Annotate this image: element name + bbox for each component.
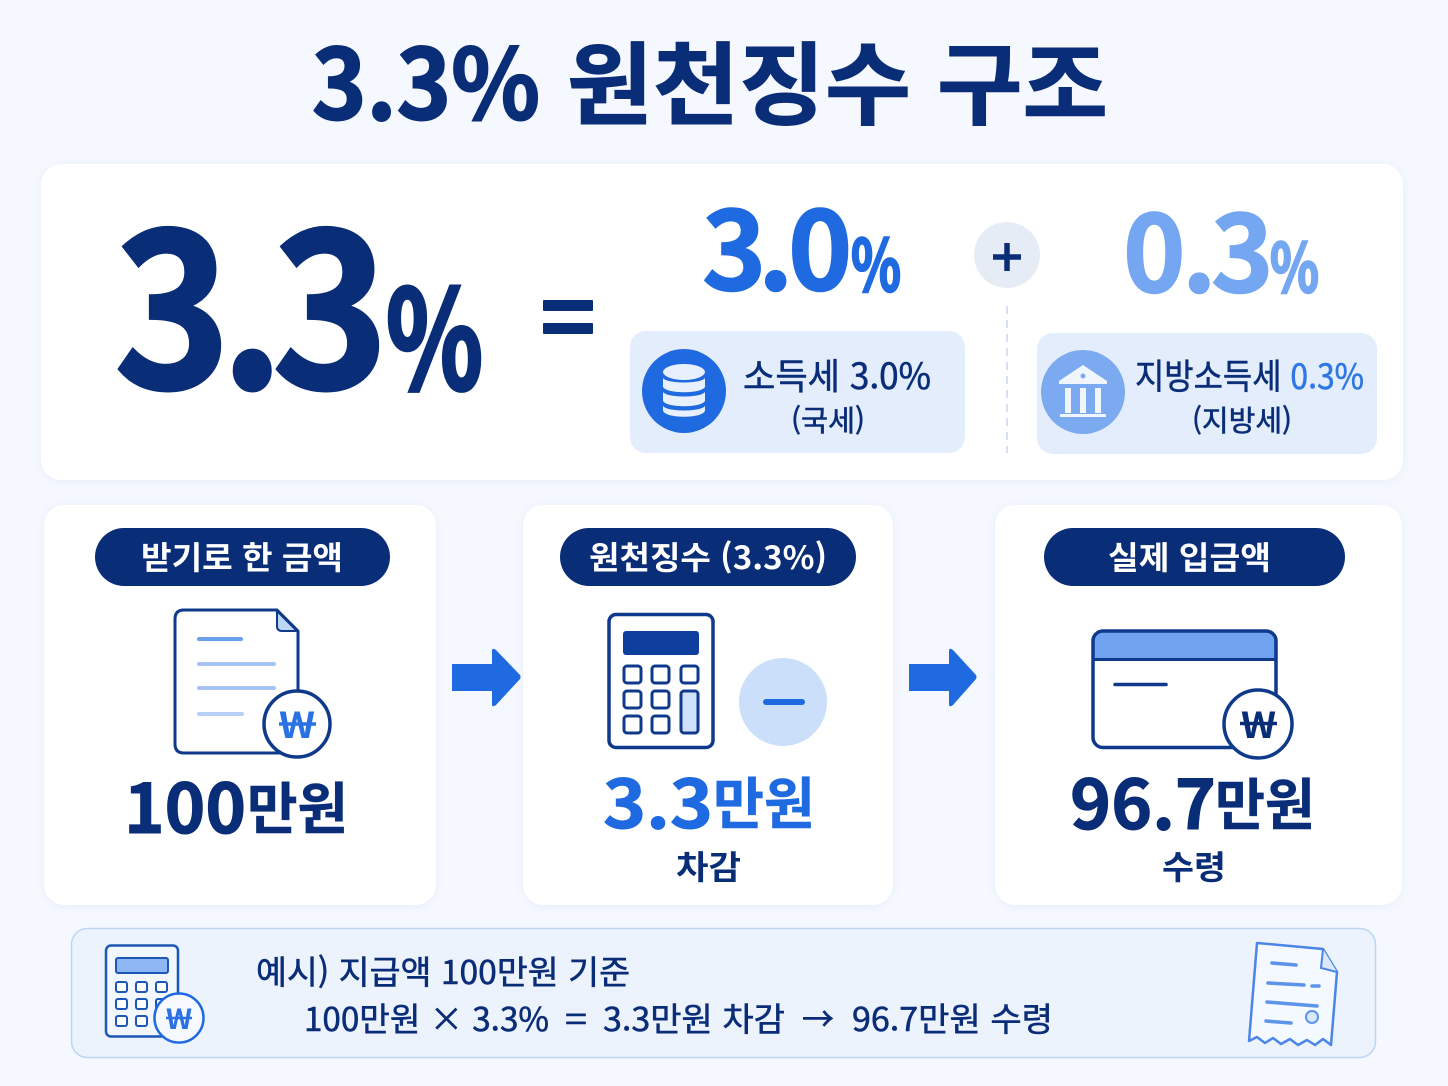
national tax rate: % [851,210,901,312]
example line 2: → [802,993,834,1041]
icon: coin stack [642,349,726,433]
equals sign [543,300,593,334]
label: received: 수령 [1162,841,1226,889]
value: 96.7만원: 96.7 [1070,750,1216,849]
big total rate: % [386,232,483,429]
icon: receipt [1249,943,1337,1045]
example line 2: 3.3만원 차감 [603,993,785,1041]
pill heading [95,528,390,586]
national income tax box [630,331,965,453]
icon: bank card with won coin [1093,631,1292,758]
title: 구조 [937,13,1108,143]
icon: document with won coin: W [279,697,315,749]
panel: example [72,928,1376,1058]
label: deducted: 차감 [676,841,741,889]
panel: withholding [523,505,893,905]
title: 3.3% [312,6,540,147]
title: 원천징수 [567,13,911,143]
title [312,6,1108,147]
arrow [909,649,976,706]
panel: net deposit [995,505,1402,905]
pill heading: 받기로 한 금액 [141,533,343,579]
label: local income tax: 지방소득세 0.3% [1135,349,1364,400]
value: 3.3만원: 3.3 [603,751,713,848]
pill heading: 실제 입금액 [1108,533,1271,579]
value: 96.7만원: 만원 [1215,761,1315,842]
example line 2 [304,993,1053,1041]
label: national tax: (국세) [791,398,865,440]
pill heading [560,528,856,586]
panel: formula [41,142,1403,480]
example line 2: 100만원 × 3.3% [304,993,549,1041]
example line 1: 예시) 지급액 100만원 기준 [256,946,630,994]
label: income tax: 소득세 3.0% [743,348,931,400]
value: 3.3만원: 만원 [713,760,815,841]
arrow [452,649,520,706]
big total rate: 3.3 [114,142,389,450]
value: 100만원: 100 [124,754,246,853]
value: 100만원: 만원 [247,765,348,846]
value: 100만원 [124,754,348,853]
example line 2: = [565,993,587,1041]
label: local tax: (지방세) [1192,398,1292,440]
national tax rate: 3.0 [702,165,852,322]
pill heading [1044,528,1345,586]
pill heading: 원천징수 (3.3%) [589,533,827,579]
icon: government building [1041,350,1125,434]
plus badge [974,222,1040,288]
icon: calculator with won coin: W [166,998,192,1038]
example line 2: 96.7만원 수령 [852,993,1053,1041]
local tax rate: 0.3 [1123,169,1274,323]
icon: document with won coin [175,610,330,757]
value: 96.7만원 [1070,750,1315,849]
panel: amount to receive [44,505,436,905]
value: 3.3만원 [603,751,815,848]
icon: calculator with won coin [106,946,204,1042]
local income tax box [1037,333,1377,454]
icon: minus badge [739,658,827,746]
icon: bank card with won coin: W [1241,697,1276,749]
icon: calculator [609,614,713,748]
local tax rate: % [1270,215,1319,312]
